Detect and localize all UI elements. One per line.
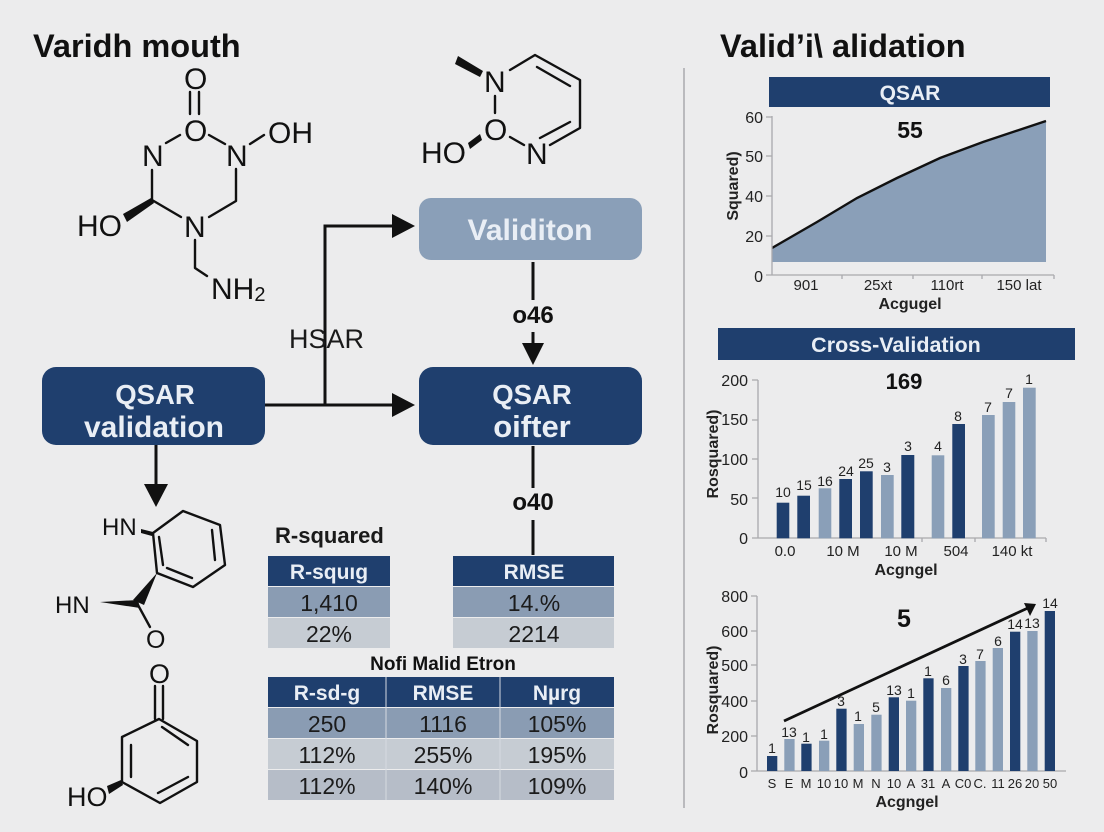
axis labels: 500 <box>721 658 748 675</box>
icon: molecule lower left amine: HN <box>55 592 90 619</box>
area chart: 25xt <box>864 277 893 294</box>
table: R-squared: 1,410 <box>300 590 358 616</box>
heading: R-squared: R-squared <box>275 523 384 548</box>
icon: molecule top centre: O <box>484 114 507 147</box>
icon: molecule top left: N <box>226 140 248 173</box>
area chart <box>725 110 1054 313</box>
table: summary: 105% <box>528 711 586 737</box>
area chart: 55 <box>897 117 923 143</box>
bar chart: cross-validation: 4 <box>934 438 942 454</box>
bar value labels: 1 <box>768 740 776 756</box>
bar chart: cross-validation: 3 <box>883 459 891 475</box>
icon: molecule lower left phenol <box>67 659 197 812</box>
table: summary: 195% <box>528 742 586 768</box>
table: summary: 1116 <box>419 711 467 737</box>
area chart: 150 lat <box>996 277 1042 294</box>
bar value labels: 7 <box>976 646 984 662</box>
bar chart: cross-validation: Acgngel <box>874 562 938 579</box>
bar value labels: 14 <box>1042 595 1058 611</box>
table: summary: 140% <box>414 773 472 799</box>
arrow: validiton to oifter with o46 label: o46 <box>512 302 554 329</box>
chart header: QSAR: QSAR <box>880 82 940 105</box>
axis labels: 11 <box>991 776 1005 791</box>
table: summary: R-sd-g <box>294 682 360 705</box>
bar chart: cross-validation: 0.0 <box>775 543 795 560</box>
table: R-squared: 22% <box>306 621 352 647</box>
bar chart: cross-validation: 7 <box>984 399 992 415</box>
arrow: to validation box <box>325 214 415 405</box>
title: left heading: Varidh mouth <box>33 28 241 64</box>
arrow: trend <box>784 603 1036 721</box>
table: summary: 112% <box>298 773 356 799</box>
area chart: 50 <box>745 149 763 166</box>
bar value labels: 14 <box>1007 616 1023 632</box>
icon: molecule top centre: HO <box>421 137 466 170</box>
axis labels: 10 <box>887 776 901 791</box>
box: Validiton: Validiton <box>467 214 593 247</box>
axis labels <box>705 589 1057 811</box>
area chart: 901 <box>793 277 819 294</box>
chart header: Cross-Validation <box>718 328 1075 360</box>
panel: QSAR area chart <box>725 77 1054 313</box>
arrow: oifter to rmse with o40 label: o40 <box>512 489 554 516</box>
area chart: 40 <box>745 189 763 206</box>
bar chart: cross-validation: 50 <box>730 492 748 509</box>
axis labels: S <box>768 776 777 791</box>
bar value labels: 1 <box>924 663 932 679</box>
axis labels: M <box>801 776 811 791</box>
title: right heading: Valid’i\ alidation <box>720 28 966 64</box>
bar chart: cross-validation: 169 <box>886 369 922 394</box>
box: QSAR validation <box>42 367 265 445</box>
bar chart: cross-validation: 8 <box>954 408 962 424</box>
icon: molecule top left: O <box>184 115 207 148</box>
table: RMSE: 2214 <box>508 621 560 647</box>
bar chart: cross-validation: 24 <box>838 463 854 479</box>
bar chart: cross-validation: 150 <box>721 412 748 429</box>
icon: molecule top left: OH <box>268 117 313 150</box>
bar chart: cross-validation: 0 <box>739 531 748 548</box>
bar value labels: 13 <box>1024 615 1040 631</box>
bar chart: cross-validation: 10 M <box>826 543 860 560</box>
area chart: 60 <box>745 110 763 127</box>
bar value labels: 1 <box>802 729 810 745</box>
icon: molecule top left: HO <box>77 210 122 243</box>
box: QSAR oifter: QSAR <box>492 379 572 410</box>
area chart: Acgugel <box>878 296 942 313</box>
icon: molecule top left: N <box>184 211 206 244</box>
bar chart: cross-validation: 1 <box>1025 371 1033 387</box>
axis labels: 10 <box>817 776 831 791</box>
area chart: Squared) <box>725 151 742 221</box>
bar chart: cross-validation <box>705 369 1046 579</box>
box: QSAR validation: validation <box>84 411 224 444</box>
icon: molecule lower left amine: HN <box>102 514 137 541</box>
bar chart: cross-validation: 16 <box>817 473 833 489</box>
box: QSAR oifter: oifter <box>493 409 571 444</box>
bar chart: cross-validation: Rosquared) <box>705 410 722 498</box>
axis labels: 600 <box>721 624 748 641</box>
icon: molecule top centre: N <box>526 138 548 171</box>
table: R-squared <box>268 556 390 648</box>
chart header: QSAR <box>769 77 1050 107</box>
bar value labels: 6 <box>942 672 950 688</box>
bar chart: cross-validation: 100 <box>721 452 748 469</box>
icon: molecule top left: 2 <box>254 284 265 306</box>
bar value labels <box>768 595 1058 756</box>
icon: molecule top left: NH <box>211 273 254 306</box>
axis labels: 800 <box>721 589 748 606</box>
area chart: 20 <box>745 229 763 246</box>
axis labels: A <box>942 776 951 791</box>
table: RMSE: RMSE <box>504 561 564 584</box>
bar chart: cross-validation: 200 <box>721 373 748 390</box>
axis labels: E <box>785 776 794 791</box>
axis labels: 26 <box>1008 776 1022 791</box>
axis labels: N <box>871 776 881 791</box>
icon: molecule lower left amine <box>55 511 225 654</box>
table: summary: 255% <box>414 742 472 768</box>
bars <box>767 611 1055 771</box>
axis labels: C0 <box>955 776 971 791</box>
axis labels: 50 <box>1043 776 1057 791</box>
bar value labels: 3 <box>837 693 845 709</box>
panel: third bar chart <box>705 589 1066 811</box>
bar value labels: 1 <box>854 708 862 724</box>
axis labels: 31 <box>921 776 935 791</box>
table: RMSE: 14.% <box>508 590 560 616</box>
bar value labels: 1 <box>820 726 828 742</box>
axis labels: 5 <box>897 605 911 633</box>
bar chart: cross-validation: 3 <box>904 438 912 454</box>
icon: molecule top left: O <box>184 63 207 96</box>
bar value labels: 5 <box>872 699 880 715</box>
bar chart: cross-validation: 15 <box>796 477 812 493</box>
heading: Nofi Malid Etron: Nofi Malid Etron <box>370 654 516 675</box>
bar chart: cross-validation: 10 <box>775 484 791 500</box>
axis labels: M <box>853 776 863 791</box>
axis labels: Rosquared) <box>705 646 722 734</box>
bar chart: cross-validation: 140 kt <box>992 543 1033 560</box>
table: summary: RMSE <box>413 682 473 705</box>
bar chart: cross-validation: 10 M <box>884 543 918 560</box>
area chart: 110rt <box>930 277 964 294</box>
bar value labels: 13 <box>781 724 797 740</box>
icon: molecule lower left phenol: O <box>149 659 170 689</box>
icon: molecule top left <box>77 63 313 306</box>
axis labels: 400 <box>721 694 748 711</box>
table: summary: 112% <box>298 742 356 768</box>
axis labels: 200 <box>721 729 748 746</box>
table: summary: 250 <box>308 711 346 737</box>
table: RMSE <box>453 556 614 648</box>
icon: molecule top left: N <box>142 140 164 173</box>
bar chart: cross-validation: 504 <box>943 543 969 560</box>
bar value labels: 3 <box>959 651 967 667</box>
bar value labels: 1 <box>907 685 915 701</box>
arrow: down from qsar validation <box>144 445 168 507</box>
bar value labels: 6 <box>994 633 1002 649</box>
icon: molecule lower left amine: O <box>146 626 165 654</box>
arrow: oifter to rmse with o40 label <box>512 446 554 555</box>
icon: molecule top centre <box>421 55 580 171</box>
icon: molecule lower left phenol: HO <box>67 782 108 812</box>
bar value labels: 13 <box>886 682 902 698</box>
bar chart: cross-validation: 7 <box>1005 385 1013 401</box>
table: R-squared: R-squıg <box>290 561 368 584</box>
arrow: validation to oifter box <box>265 393 415 417</box>
icon: molecule top centre: N <box>484 66 506 99</box>
table: summary <box>268 677 614 800</box>
label: HSAR: HSAR <box>289 324 364 354</box>
axis labels: Acgngel <box>875 794 939 811</box>
axis labels: A <box>907 776 916 791</box>
bar chart: cross-validation: 25 <box>858 455 874 471</box>
axis labels: 10 <box>834 776 848 791</box>
arrow: validiton to oifter with o46 label <box>512 262 554 365</box>
box: Validiton <box>419 198 642 260</box>
axis labels: 20 <box>1025 776 1039 791</box>
area chart: 0 <box>754 269 763 286</box>
table: summary: Nµrg <box>533 682 581 705</box>
box: QSAR oifter <box>419 367 642 445</box>
chart header: Cross-Validation: Cross-Validation <box>811 333 981 357</box>
box: QSAR validation: QSAR <box>115 379 195 410</box>
axis labels: 0 <box>739 765 748 782</box>
table: summary: 109% <box>528 773 586 799</box>
axis labels: C. <box>974 776 986 791</box>
panel: cross-validation bar chart <box>705 328 1075 579</box>
